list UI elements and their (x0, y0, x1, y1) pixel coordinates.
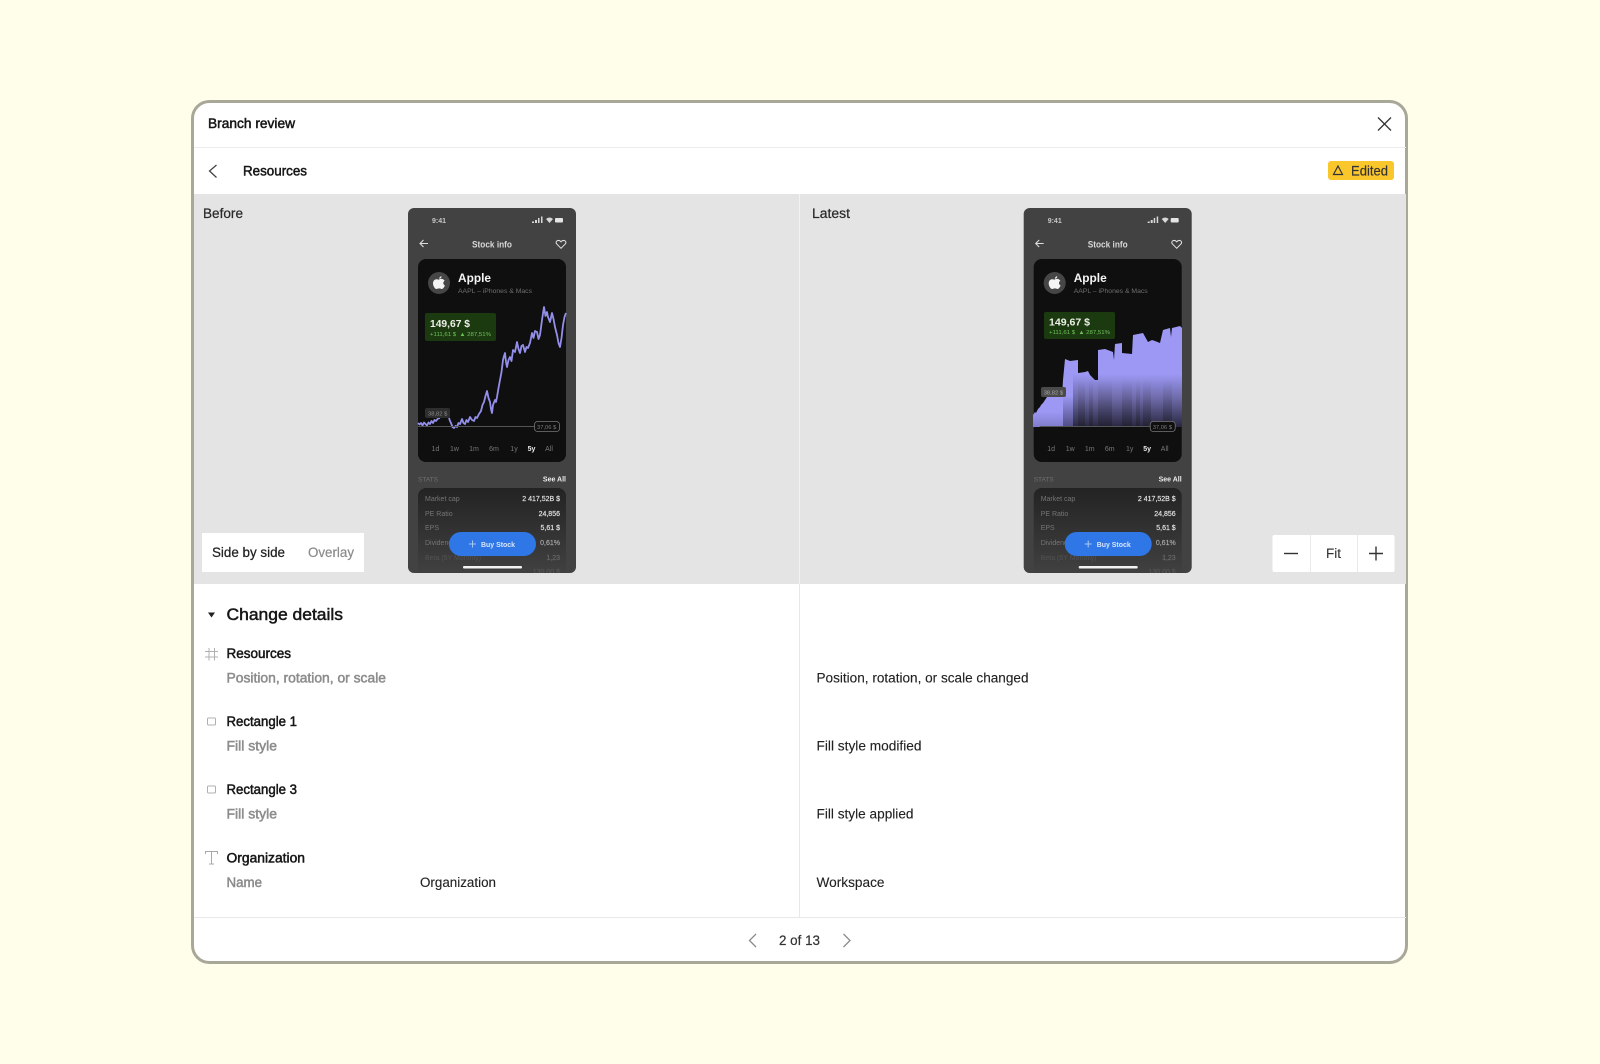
stats table (418, 488, 566, 573)
card: stock chart: AAPL – iPhones & Macs (1074, 288, 1148, 295)
home indicator (463, 566, 522, 568)
stats table: Dividend (425, 540, 452, 547)
area chart: latest (1033, 320, 1182, 428)
time range selector: 1y (1126, 446, 1134, 453)
infographic canvas (191, 100, 1408, 964)
icon: rectangle (208, 786, 216, 793)
stats table: 1,23 (1162, 555, 1176, 562)
tag: low price (534, 422, 560, 432)
icon: apple logo (1044, 272, 1066, 294)
time range selector: 5y (1143, 446, 1151, 453)
icon: back chevron (210, 165, 216, 178)
zoom controls (1272, 535, 1394, 572)
row: organization: Workspace (816, 875, 884, 890)
icon: text layer (206, 852, 218, 864)
row: organization (206, 850, 884, 890)
row: resources: Position, rotation, or scale changed (816, 670, 1028, 686)
label: before: Before (203, 206, 243, 221)
phone: before: 9:41 (432, 218, 446, 225)
tag: low price: 37,06 $ (1153, 425, 1173, 431)
price callout: 149,67 $ (1049, 318, 1090, 328)
price callout: +111,61 $ ▲ 287,51% (430, 332, 491, 338)
icon: close (1378, 118, 1391, 130)
panel: pagination footer (194, 917, 1406, 948)
tag: low price (1150, 422, 1175, 432)
stats heading: STATS (418, 476, 439, 484)
tag: start price (1041, 387, 1066, 397)
time range selector: 1m (469, 446, 479, 453)
row: organization: Organization (226, 850, 305, 866)
zoom controls: Fit (1326, 546, 1341, 561)
time range selector: All (1161, 446, 1169, 453)
stats table: EPS (1041, 525, 1055, 532)
stats table: 130,00 $ (533, 569, 560, 576)
time range selector: 1w (1066, 446, 1076, 453)
stats table: Dividend (1041, 540, 1068, 547)
icon: back arrow (1036, 240, 1044, 247)
icon: frame hash (205, 648, 218, 660)
icon: next (844, 934, 850, 947)
view toggle (202, 533, 364, 572)
stats heading: STATS (1034, 476, 1054, 484)
badge: edited: Edited (1351, 162, 1388, 178)
home indicator (1079, 566, 1138, 568)
phone: latest: 9:41 (1048, 218, 1062, 225)
stats heading: See All (543, 476, 566, 484)
stats heading: See All (1159, 476, 1182, 484)
stats table (1034, 488, 1182, 573)
row: rectangle 3: Rectangle 3 (226, 782, 297, 797)
price callout (1044, 312, 1115, 339)
baseline marker (1040, 426, 1150, 427)
time range selector: 1m (1085, 446, 1095, 453)
row: organization: Organization (420, 875, 496, 890)
view toggle: Overlay (308, 544, 354, 560)
card: stock chart (1034, 259, 1182, 462)
button: buy stock: Buy Stock (481, 540, 515, 549)
row: resources (205, 646, 1028, 686)
icon: heart (1172, 240, 1182, 248)
row: rectangle 1: Fill style modified (816, 738, 922, 754)
stats table: 1,23 (546, 555, 560, 562)
card: stock chart (418, 259, 566, 462)
stats table: 24,856 (1154, 511, 1176, 518)
time range selector: 1d (1047, 446, 1055, 453)
company name: Apple (1074, 271, 1107, 285)
card: stock chart: AAPL – iPhones & Macs (458, 288, 533, 295)
screen title: Stock info (472, 240, 512, 250)
tag: start price: 38,82 $ (428, 412, 448, 418)
time range selector: 1d (432, 446, 439, 453)
time range selector (1047, 446, 1169, 453)
section heading: Change details (226, 605, 343, 624)
price callout: 149,67 $ (430, 319, 470, 330)
price callout: +111,61 $ ▲ 287,51% (1049, 330, 1110, 336)
stats table: PE Ratio (1041, 511, 1068, 518)
button: buy stock (449, 532, 536, 556)
phone: before (408, 208, 576, 583)
stats table: 5,61 $ (1156, 525, 1176, 532)
tag: low price: 37,06 $ (537, 425, 557, 431)
view toggle: Side by side (212, 544, 285, 560)
row: rectangle 3: Fill style applied (816, 806, 914, 822)
row: rectangle 1: Rectangle 1 (226, 714, 297, 729)
time range selector (432, 446, 553, 453)
stats table: 5,61 $ (541, 525, 560, 532)
icon: back arrow (420, 240, 428, 247)
row: organization: Name (226, 875, 262, 890)
panel: branch review window (192, 102, 1406, 962)
button: buy stock (1065, 532, 1152, 556)
stats table: 2 417,52B $ (1138, 496, 1176, 503)
stats heading (1034, 476, 1182, 484)
stats table: Beta (5Y Monthly) (1041, 555, 1097, 562)
stats table: 0,61% (540, 540, 560, 547)
icon: disclosure triangle (208, 612, 215, 618)
stats table: PE Ratio (425, 511, 453, 518)
page name: Resources (243, 162, 307, 178)
icon: heart (556, 240, 566, 248)
stats table: 2 417,52B $ (522, 496, 560, 503)
stats heading (418, 476, 566, 484)
row: rectangle 3: Fill style (226, 806, 277, 822)
time range selector: 6m (1105, 446, 1115, 453)
stats table: 0,61% (1156, 540, 1176, 547)
stats table: Market cap (1041, 496, 1075, 503)
row: rectangle 1 (208, 714, 922, 754)
tag: start price: 38,82 $ (1044, 390, 1064, 396)
panel: change details (205, 584, 1028, 917)
window title: Branch review (208, 115, 296, 131)
label: latest: Latest (812, 206, 850, 221)
line chart (418, 307, 566, 428)
time range selector: 1w (450, 446, 460, 453)
icon: rectangle (208, 718, 216, 725)
page counter: 2 of 13 (779, 933, 820, 948)
stats table: Beta (5Y Monthly) (425, 555, 481, 562)
company name: Apple (458, 271, 491, 285)
row: rectangle 1: Fill style (226, 738, 277, 754)
button: buy stock: Buy Stock (1097, 540, 1131, 549)
phone: latest overlays (1034, 312, 1182, 583)
baseline marker (418, 426, 534, 427)
row: resources: Resources (226, 646, 291, 661)
icon: apple logo (428, 272, 450, 294)
badge: edited (1328, 161, 1394, 180)
time range selector: 5y (528, 446, 535, 453)
phone: latest (1024, 208, 1192, 573)
row: rectangle 3 (208, 782, 914, 822)
panel: comparison canvas (194, 194, 1406, 584)
time range selector: 1y (510, 446, 518, 453)
stats table: 24,856 (539, 511, 560, 518)
stats table: 130,00 $ (1148, 569, 1176, 576)
stats table: EPS (425, 525, 439, 532)
time range selector: All (545, 446, 553, 453)
screen title: Stock info (1088, 240, 1128, 250)
price callout (425, 313, 496, 341)
row: resources: Position, rotation, or scale (226, 670, 386, 686)
icon: previous (750, 934, 756, 947)
time range selector: 6m (489, 446, 499, 453)
stats table: Market cap (425, 496, 460, 503)
tag: start price (425, 408, 450, 418)
